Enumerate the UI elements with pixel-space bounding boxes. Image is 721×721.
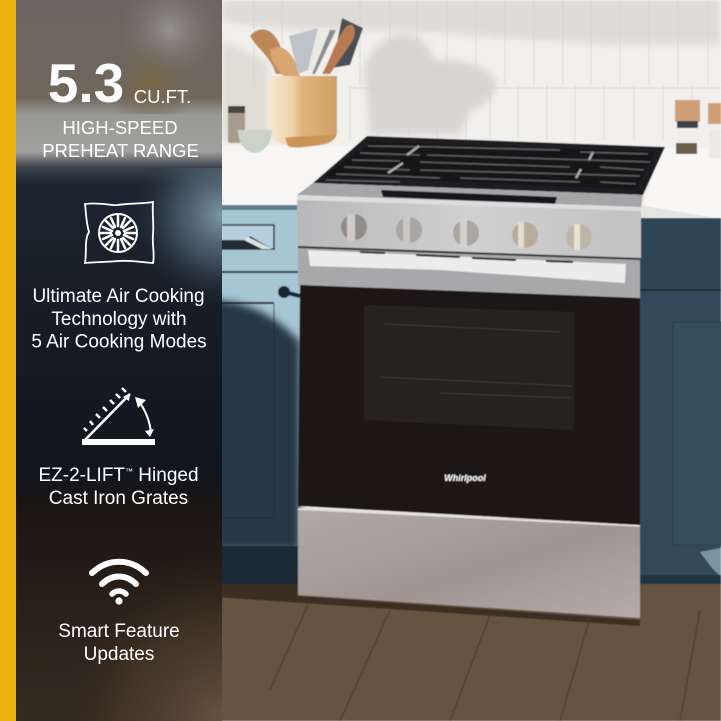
icon: hinged grate xyxy=(82,388,155,445)
heading: capacity: 5.3 xyxy=(48,52,124,114)
range xyxy=(297,136,665,618)
text: ultimate air cooking: 5 Air Cooking Modes xyxy=(31,332,207,352)
text: ultimate air cooking: Ultimate Air Cooking xyxy=(32,286,205,307)
text: smart feature updates xyxy=(58,621,180,665)
right cabinet xyxy=(640,218,721,607)
cooktop xyxy=(313,136,665,195)
panel: blurred overlay xyxy=(16,0,222,721)
knobs xyxy=(341,214,592,250)
text: EZ-2-LIFT grates xyxy=(38,465,199,509)
text: EZ-2-LIFT grates: EZ-2-LIFT xyxy=(38,465,125,486)
text: ultimate air cooking xyxy=(31,286,207,352)
text: PREHEAT RANGE xyxy=(42,140,199,161)
control panel xyxy=(297,195,641,258)
text: EZ-2-LIFT grates: Cast Iron Grates xyxy=(49,488,188,509)
text: smart feature updates: Updates xyxy=(84,644,154,665)
steel top strip xyxy=(297,183,643,208)
floor xyxy=(200,584,721,721)
kitchen photo background xyxy=(200,0,721,721)
pepper mills xyxy=(675,100,721,158)
left cabinet xyxy=(200,205,300,584)
wall shadow xyxy=(222,0,721,140)
counter xyxy=(200,146,360,205)
drawer xyxy=(298,508,640,618)
yellow side bar xyxy=(0,0,16,721)
text: ultimate air cooking: Technology with xyxy=(51,309,187,330)
wall tile lines xyxy=(254,0,721,140)
logo: Whirlpool xyxy=(444,473,486,483)
heading: capacity: CU.FT. xyxy=(134,86,191,107)
oven door xyxy=(298,285,640,525)
door frame and handle xyxy=(298,247,640,298)
text: EZ-2-LIFT grates: ™ xyxy=(125,467,133,476)
utensil crock xyxy=(250,18,363,148)
heading: capacity xyxy=(48,52,191,114)
icon: air cooking fan xyxy=(85,202,154,263)
text: EZ-2-LIFT grates: Hinged xyxy=(133,465,199,486)
spice jar and bowl xyxy=(228,106,272,153)
subheading: preheat range: HIGH-SPEED xyxy=(62,117,178,138)
icon: wifi xyxy=(92,562,146,605)
text: smart feature updates: Smart Feature xyxy=(58,621,180,642)
